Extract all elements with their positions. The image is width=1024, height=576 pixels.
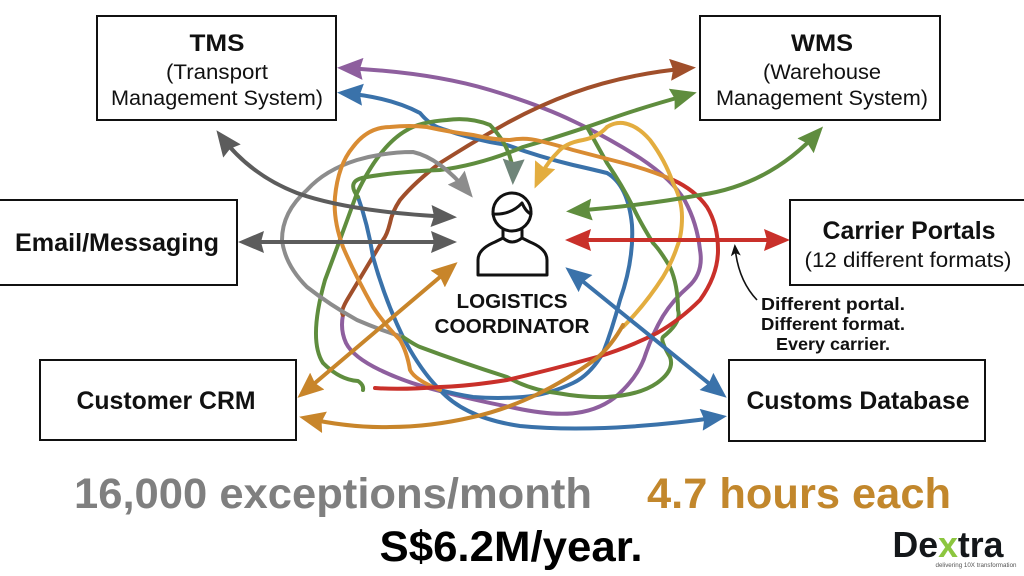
arrow: WMS to coordinator green [572, 131, 819, 211]
panel: TMS: Management System) [111, 87, 323, 110]
arrow: carrier portals to coordinator red [571, 238, 784, 242]
heading: logistics coordinator: LOGISTICS [456, 291, 568, 313]
panel: WMS: (Warehouse [763, 61, 881, 84]
panel: Carrier Portals [790, 200, 1024, 285]
panel: Customs Database: Customs Database [746, 387, 970, 415]
stat: annual cost: S$6.2M/year. [380, 523, 642, 571]
arrow: green arc into coordinator [316, 119, 513, 390]
logo: Dextra: Dextra [892, 524, 1004, 565]
panel: Customer CRM: Customer CRM [76, 387, 256, 415]
panel: Email/Messaging [0, 200, 237, 285]
panel: Email/Messaging: Email/Messaging [15, 229, 219, 257]
stat: exceptions per month: 16,000 exceptions/month [74, 470, 592, 518]
arrow: TMS purple line [342, 68, 701, 414]
tangled connection lines [220, 68, 819, 429]
panel: Customs Database [729, 360, 985, 441]
line: green bottom loop [403, 127, 679, 397]
arrow: callout pointer [735, 247, 757, 300]
panel: WMS: Management System) [716, 87, 928, 110]
arrow: grey loop into coordinator [282, 152, 469, 337]
panel: WMS: WMS [791, 30, 853, 57]
icon: logistics coordinator person [478, 193, 547, 275]
arrow: customs blue curved line [358, 197, 721, 429]
callout: carrier note: Every carrier. [776, 334, 890, 354]
heading: logistics coordinator [434, 291, 590, 338]
arrow: email to coordinator [244, 240, 451, 244]
arrow: orange line to CRM [305, 325, 623, 427]
heading: logistics coordinator: COORDINATOR [434, 316, 590, 338]
panel: Carrier Portals: Carrier Portals [822, 217, 996, 245]
stat: hours each: 4.7 hours each [647, 470, 951, 518]
callout: carrier note [761, 294, 905, 354]
arrow: WMS brown line [342, 68, 690, 315]
line: red loop [375, 180, 718, 389]
panel: Customer CRM [40, 360, 296, 440]
arrow: TMS to coordinator dark grey [220, 135, 451, 217]
panel: Carrier Portals: (12 different formats) [804, 249, 1012, 272]
panel: TMS: TMS [190, 30, 244, 57]
arrow: customs to coordinator blue [570, 271, 722, 394]
panel: WMS [700, 16, 940, 120]
arrow: TMS blue line [343, 93, 632, 398]
arrow: yellow line into coordinator [537, 123, 682, 327]
arrow: WMS green line [353, 94, 691, 197]
line: orange loop [335, 126, 673, 390]
panel: TMS [97, 16, 336, 120]
arrow: CRM to coordinator orange [302, 266, 453, 394]
panel: TMS: (Transport [166, 61, 268, 84]
callout: carrier note: Different portal. [761, 294, 905, 314]
callout: carrier note: Different format. [761, 314, 905, 334]
logo: Dextra: delivering 10X transformation [936, 563, 1016, 569]
